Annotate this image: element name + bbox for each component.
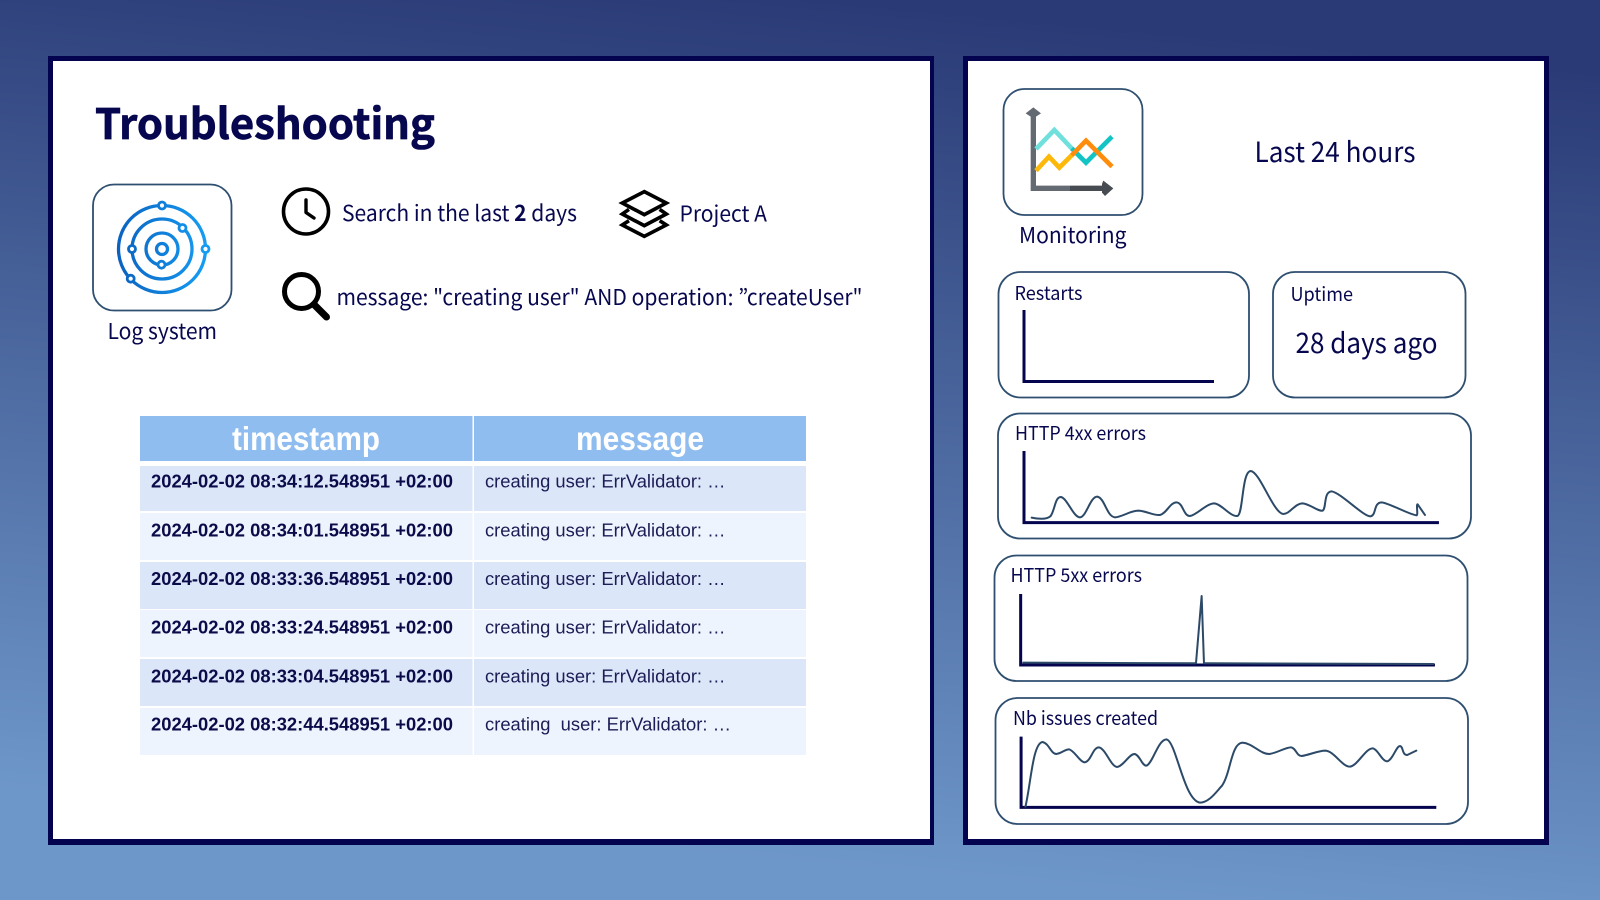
table row 5: creating user: ErrValidator: … (485, 666, 726, 686)
icon: clock (284, 189, 328, 234)
table row 4: 2024-02-02 08:33:24.548951 +02:00 (151, 616, 453, 638)
card: Nb issues created (996, 698, 1468, 824)
table row 6 (140, 708, 806, 755)
label: log system: Log system (108, 314, 217, 346)
table row 3: 2024-02-02 08:33:36.548951 +02:00 (151, 568, 453, 589)
table row 5 (140, 659, 806, 706)
table header: timestamp (232, 420, 380, 457)
icon: layers (622, 192, 666, 236)
table row 4 (140, 610, 806, 657)
card: Nb issues created: Nb issues created (1013, 704, 1158, 731)
table header (140, 416, 806, 461)
card: uptime: 28 days ago (1296, 322, 1438, 362)
chart: 5xx errors (1021, 594, 1435, 665)
card: HTTP 5xx errors: HTTP 5xx errors (1010, 561, 1142, 588)
table row 1: creating user: ErrValidator: … (485, 470, 726, 492)
card: HTTP 4xx errors: HTTP 4xx errors (1015, 419, 1146, 446)
table row 6: creating user: ErrValidator: … (485, 714, 731, 734)
card: HTTP 5xx errors (994, 556, 1468, 681)
table row 6: 2024-02-02 08:32:44.548951 +02:00 (151, 714, 453, 734)
chart: issues created (1021, 737, 1436, 807)
table row 3: creating user: ErrValidator: … (485, 568, 726, 589)
table row 5: 2024-02-02 08:33:04.548951 +02:00 (151, 666, 453, 686)
text: project: Project A (680, 196, 768, 228)
table row 1 (140, 466, 806, 511)
table row 2: 2024-02-02 08:34:01.548951 +02:00 (151, 520, 453, 540)
icon: log system (93, 184, 232, 310)
table: logs (140, 416, 806, 755)
label: monitoring: Monitoring (1019, 218, 1127, 250)
card: restarts: Restarts (1014, 279, 1083, 306)
icon: search (284, 274, 326, 317)
panel: monitoring (963, 56, 1549, 845)
card: restarts (998, 272, 1249, 398)
card: uptime: Uptime (1290, 280, 1353, 307)
table row 2: creating user: ErrValidator: … (485, 520, 726, 540)
text: search query: message: "creating user" AND operation: ”createUser" (336, 280, 862, 312)
text: time range: Last 24 hours (1254, 131, 1416, 171)
text: search range: Search in the last 2 days (342, 196, 577, 228)
table row 2 (140, 513, 806, 560)
table header: message (576, 420, 704, 457)
table row 1: 2024-02-02 08:34:12.548951 +02:00 (151, 470, 453, 492)
title: Troubleshooting (95, 91, 435, 152)
table row 4: creating user: ErrValidator: … (485, 616, 726, 638)
panel: troubleshooting (48, 56, 934, 845)
icon: monitoring chart (1004, 89, 1142, 215)
card: HTTP 4xx errors (998, 414, 1471, 538)
table row 3 (140, 562, 806, 609)
card: uptime (1273, 272, 1466, 398)
chart: 4xx errors (1024, 451, 1439, 523)
